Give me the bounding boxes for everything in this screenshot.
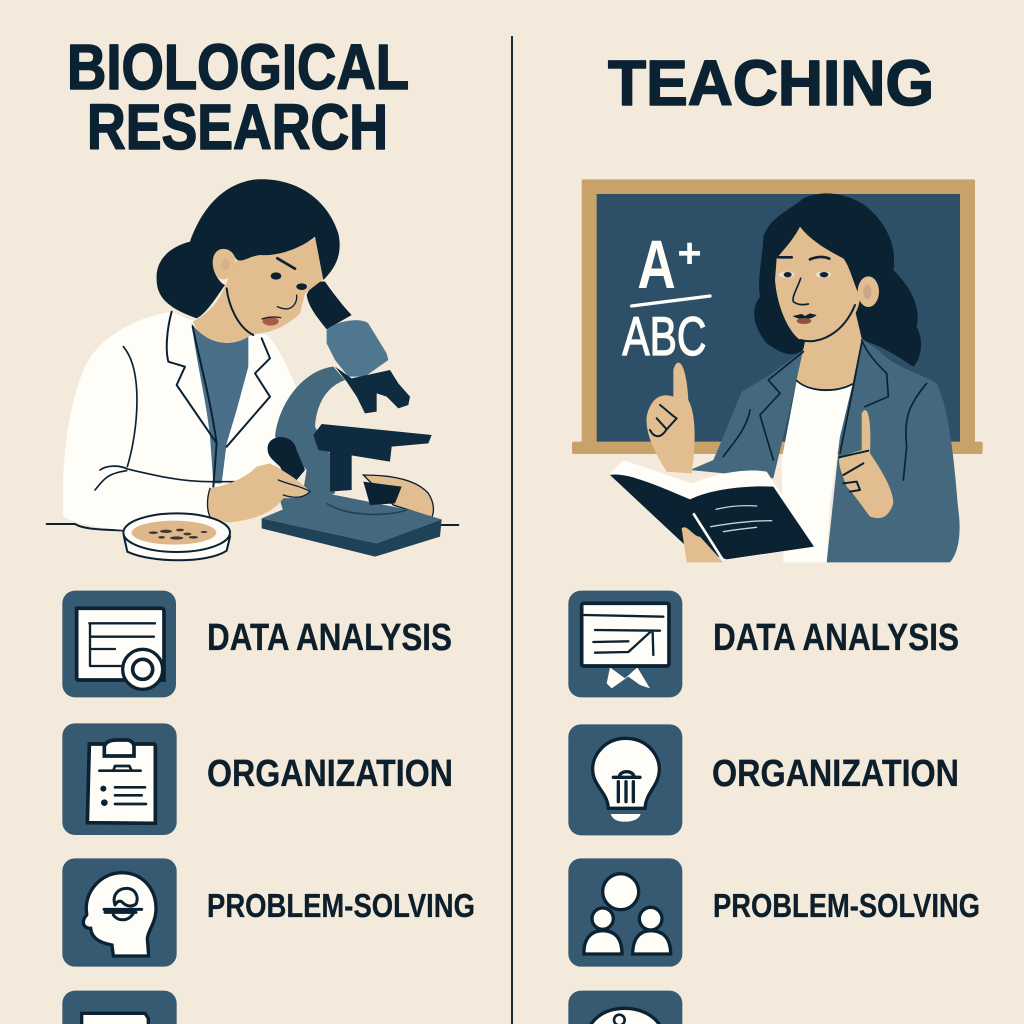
shirt [782, 381, 853, 562]
icon: light bulb [568, 724, 682, 835]
illustration: scientist at microscope [47, 179, 458, 560]
icon: data sheet with seal [62, 591, 176, 697]
skill row: organization [568, 724, 959, 835]
hair [754, 193, 921, 367]
illustration: teacher at chalkboard [572, 179, 983, 562]
chalkboard: ABC [622, 305, 706, 367]
neck [797, 310, 862, 389]
raised left hand [646, 363, 695, 473]
icon: head with gears [62, 858, 177, 967]
skill row: data analysis [62, 591, 452, 697]
skill row: cropped fourth icon [568, 991, 682, 1024]
skill row: organization [62, 723, 453, 835]
face [775, 227, 879, 342]
chalkboard [572, 179, 983, 454]
label: DATA ANALYSIS [207, 617, 452, 659]
head and face [157, 179, 340, 335]
label: ORGANIZATION [207, 753, 453, 795]
heading: biological research: RESEARCH [87, 91, 388, 163]
icon: presentation board [568, 591, 682, 697]
panel: teaching [568, 47, 983, 1024]
microscope [262, 281, 442, 557]
label: DATA ANALYSIS [713, 617, 959, 659]
heading: teaching: TEACHING [608, 47, 934, 119]
label: ORGANIZATION [712, 753, 959, 795]
label: PROBLEM-SOLVING [207, 887, 475, 924]
petri dish [123, 513, 230, 560]
chalkboard: A [637, 227, 676, 303]
chalkboard: + [677, 229, 702, 276]
panel: biological research [47, 31, 475, 1024]
jacket [690, 338, 960, 562]
gesturing right hand [839, 410, 893, 518]
icon: group of people [568, 858, 682, 967]
skill row: data analysis [568, 591, 959, 697]
skill row: problem-solving [62, 858, 475, 967]
icon: clipboard [62, 723, 177, 835]
skill row: problem-solving [568, 858, 980, 967]
open book [610, 460, 816, 562]
hand on focus knob [207, 463, 310, 523]
skill row: cropped fourth icon [62, 991, 177, 1024]
heading: biological research: BIOLOGICAL [67, 31, 409, 103]
heading: biological research [67, 31, 409, 163]
